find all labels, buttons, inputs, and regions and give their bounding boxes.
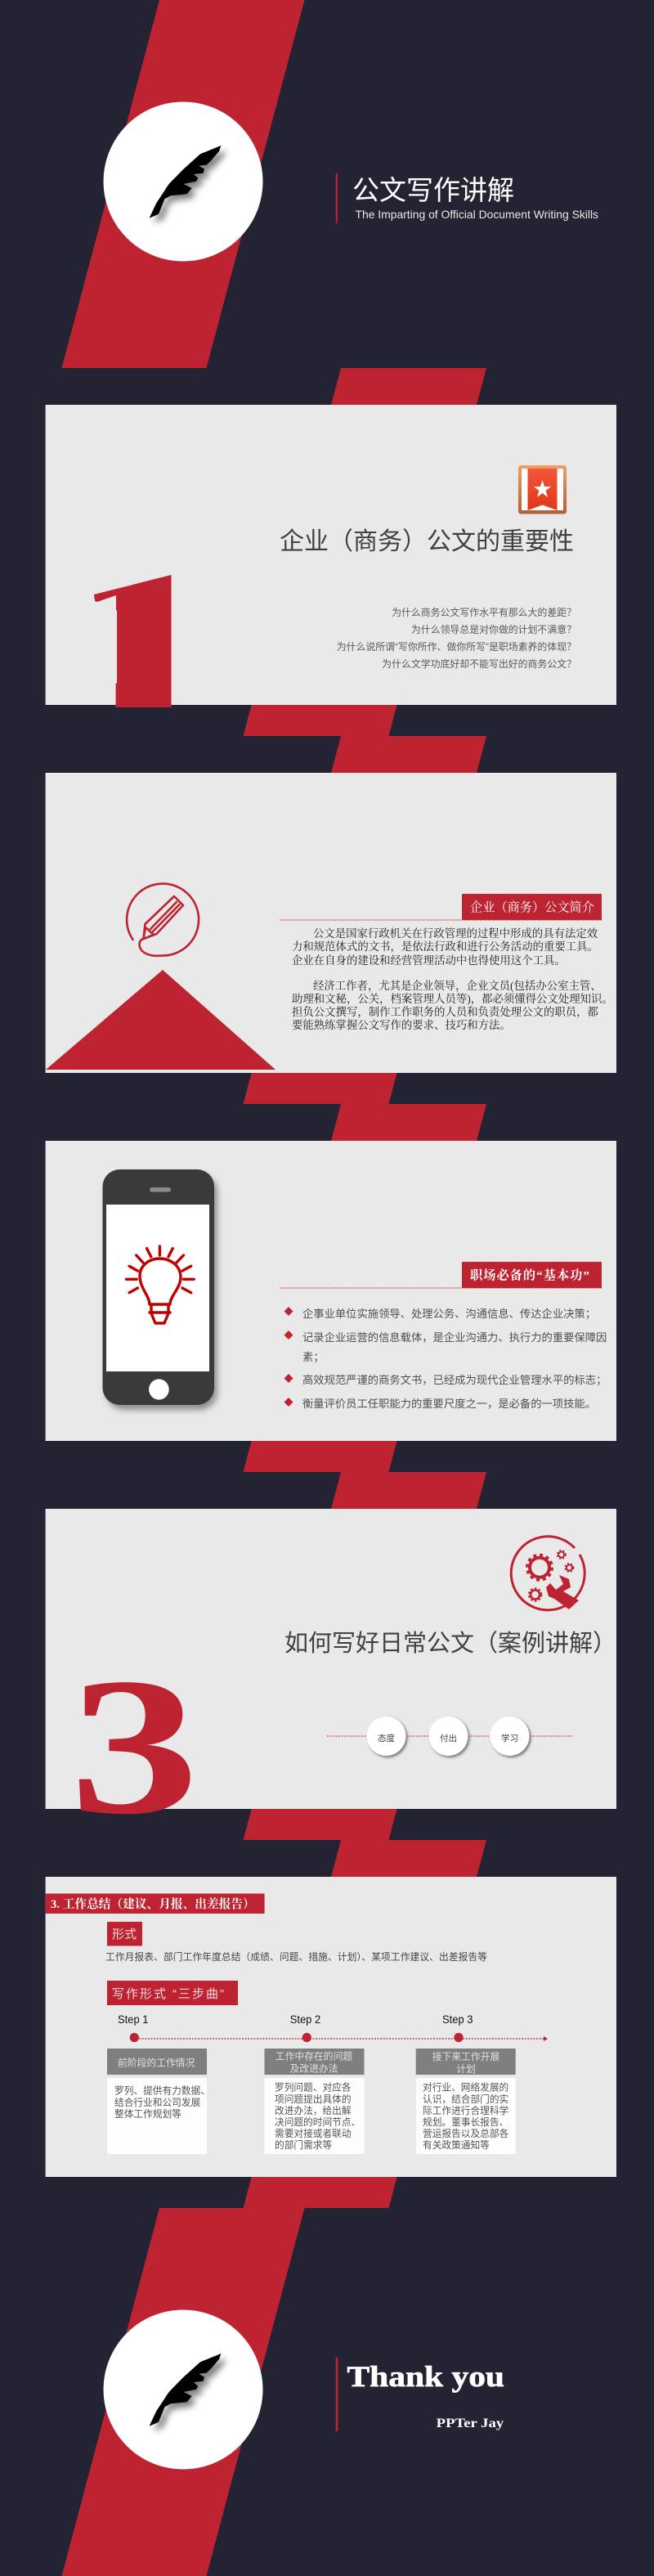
attitude steps [327, 1717, 573, 1757]
subtitle: The Imparting of Official Document Writing Skills [355, 208, 598, 221]
step 1 card: 整体工作规划等 [114, 2108, 181, 2120]
accent bar [336, 173, 338, 223]
bullet list: 记录企业运营的信息载体，是企业沟通力、执行力的重要保障因 [302, 1331, 607, 1344]
step 1 card: 罗列、提供有力数据、 [114, 2085, 210, 2097]
attitude steps: 付出 [440, 1733, 457, 1744]
step 2 card: 及改进办法 [289, 2062, 338, 2074]
body text [292, 927, 613, 1031]
header tag: 职场必备的“基本功” [470, 1268, 589, 1282]
timeline: Step 3 [442, 2013, 473, 2026]
step 1 card [107, 2049, 210, 2154]
header tag [280, 1262, 602, 1288]
panel: basic skill [46, 1104, 616, 1472]
form description: 工作月报表、部门工作年度总结（成绩、问题、措施、计划）、某项工作建议、出差报告等 [105, 1951, 487, 1963]
heading tag [46, 1894, 265, 1914]
questions: 为什么领导总是对你做的计划不满意？ [411, 624, 576, 635]
questions: 为什么文学功底好却不能写出好的商务公文？ [382, 658, 576, 670]
big numeral 3: 3 [69, 1638, 199, 1855]
icon: feather in white circle [103, 2309, 263, 2470]
big numeral 1: 1 [57, 537, 221, 749]
panel: closing slide [62, 2208, 504, 2576]
step 2 card [265, 2049, 365, 2154]
questions [337, 607, 576, 670]
body text: 经济工作者，尤其是企业领导，企业文员(包括办公室主管、 [313, 979, 602, 993]
body text: 要能熟练掌握公文写作的要求、技巧和方法。 [292, 1018, 511, 1031]
timeline [118, 2013, 548, 2042]
panel: section 1 importance [46, 368, 616, 749]
icon: bookmark [518, 465, 567, 514]
step 1 card: 结合行业和公司发展 [114, 2097, 201, 2108]
heading tag: 3. 工作总结（建议、月报、出差报告） [51, 1896, 255, 1911]
body text: 企业在自身的建设和经营管理活动中也得使用这个工具。 [292, 954, 566, 967]
body text: 力和规范体式的文书，是依法行政和进行公务活动的重要工具。 [292, 940, 598, 954]
questions: 为什么商务公文写作水平有那么大的差距？ [392, 607, 576, 618]
bullet list: 素； [302, 1351, 325, 1364]
thank you: Thank you [347, 2360, 504, 2393]
step 2 card: 工作中存在的问题 [275, 2051, 352, 2062]
bullet list [284, 1307, 607, 1410]
author: PPTer Jay [437, 2417, 504, 2430]
timeline: Step 1 [118, 2013, 149, 2026]
step 3 card: 认识，结合部门的实 [423, 2094, 508, 2105]
bullet list: 衡量评价员工任职能力的重要尺度之一，是必备的一项技能。 [302, 1397, 596, 1410]
step 3 card: 有关政策通知等 [423, 2139, 490, 2151]
panel: section 3 how to write [46, 1472, 616, 1855]
header tag [280, 894, 602, 920]
step 3 card: 际工作进行合理科学 [423, 2105, 509, 2116]
tag: form [107, 1922, 142, 1946]
step 3 card: 营运报告以及总部各 [423, 2128, 509, 2139]
icon: gears and wrench [511, 1537, 585, 1610]
icon: phone [103, 1169, 217, 1410]
step 3 card [416, 2049, 516, 2154]
step 2 card: 改进办法，给出解 [275, 2105, 352, 2116]
attitude steps: 态度 [378, 1733, 395, 1744]
step 1 card: 前阶段的工作情况 [118, 2058, 195, 2069]
step 2 card: 的部门需求等 [275, 2139, 332, 2151]
accent bar [336, 2357, 338, 2431]
tag: writing format: 写作形式 “三步曲” [112, 1987, 224, 2001]
icon: light bulb [127, 1246, 194, 1323]
attitude steps: 学习 [501, 1733, 518, 1744]
body text: 担负公文撰写，制作工作职务的人员和负责处理公文的职员，都 [292, 1005, 599, 1019]
panel: section intro [46, 736, 616, 1104]
bullet list: 高效规范严谨的商务文书，已经成为现代企业管理水平的标志； [302, 1373, 607, 1387]
step 3 card: 规划。董事长报告、 [423, 2116, 508, 2128]
body text: 助理和文秘，公关，档案管理人员等)，都必须懂得公文处理知识。 [292, 992, 613, 1006]
title: 公文写作讲解 [352, 175, 514, 205]
step 2 card: 罗列问题、对应各 [275, 2082, 352, 2094]
bullet list: 企事业单位实施领导、处理公务、沟通信息、传达企业决策； [302, 1307, 596, 1321]
panel: work summary [46, 1840, 616, 2208]
heading: 如何写好日常公文（案例讲解） [284, 1630, 616, 1657]
icon: feather in white circle [103, 101, 263, 262]
step 3 card: 计划 [456, 2063, 476, 2075]
triangle [46, 970, 275, 1070]
step 2 card: 项问题提出具体的 [275, 2094, 352, 2105]
body text: 公文是国家行政机关在行政管理的过程中形成的具有法定效 [313, 927, 598, 940]
tag: form: 形式 [112, 1928, 137, 1941]
tag: writing format [107, 1981, 238, 2005]
panel: cover slide [62, 0, 598, 368]
heading: 企业（商务）公文的重要性 [280, 528, 574, 555]
step 2 card: 需要对接或者联动 [275, 2128, 352, 2139]
step 3 card: 对行业、网络发展的 [423, 2082, 508, 2094]
step 2 card: 决问题的时间节点、 [275, 2116, 361, 2128]
icon: pencil [127, 884, 199, 956]
step 3 card: 接下来工作开展 [432, 2051, 499, 2062]
timeline: Step 2 [290, 2013, 320, 2026]
questions: 为什么说所谓“写你所作、做你所写”是职场素养的体现？ [337, 641, 576, 653]
header tag: 企业（商务）公文简介 [470, 901, 594, 914]
